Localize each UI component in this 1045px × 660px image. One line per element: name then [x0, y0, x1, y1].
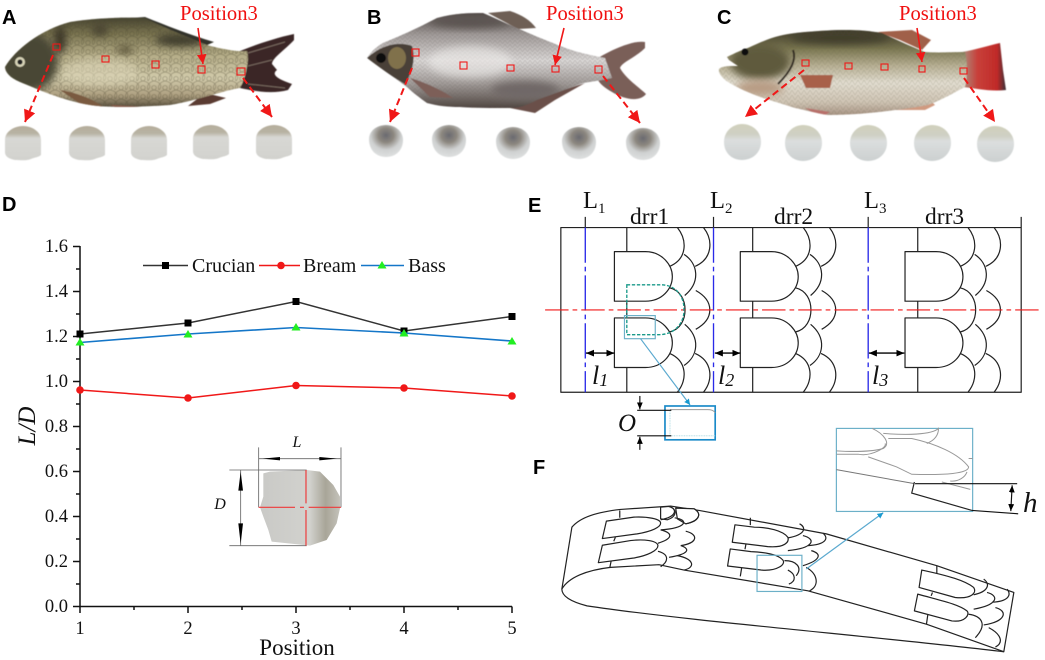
y axis tick labels: 0.4 [45, 507, 68, 527]
small detail box [757, 555, 802, 591]
blue section lines [585, 228, 868, 392]
x axis tick labels [75, 619, 517, 639]
sampling position markers [53, 44, 245, 75]
label L3: L [864, 187, 879, 214]
inset: magnified riblet [836, 428, 973, 511]
arrow: zoom to inset [806, 513, 883, 569]
label drr3: drr3 [925, 204, 964, 230]
label D: D [213, 496, 226, 513]
label L1: 1 [598, 201, 605, 217]
label l2: l [718, 361, 725, 390]
photo: crucian fish [0, 17, 294, 109]
riblet group 2 [740, 228, 836, 392]
legend [143, 255, 446, 277]
inset: scale with L and D dimensions [213, 434, 341, 546]
panel B: bream [367, 3, 660, 160]
photo: bream fish [367, 11, 646, 113]
y axis tick labels: 1.4 [45, 282, 68, 302]
label l1: 1 [599, 370, 608, 390]
panel label B: B [367, 7, 381, 29]
photo: bass fish [719, 30, 1006, 115]
panel label D: D [2, 194, 16, 216]
label L2: 2 [725, 201, 732, 217]
panel label E: E [528, 195, 541, 217]
dimension h [915, 484, 1018, 514]
label drr1: drr1 [630, 204, 669, 230]
label l3: l [872, 361, 879, 390]
y axis tick labels: 1.2 [45, 327, 68, 347]
riblets group 1 [598, 506, 699, 570]
sampling position markers [802, 60, 967, 74]
callout: Position3: Position3 [546, 3, 624, 25]
series: Bass [76, 323, 516, 346]
panel label A: A [2, 7, 16, 29]
y axis tick labels: 0.0 [45, 597, 68, 617]
y axis title: L/D [14, 407, 41, 446]
crucian scale samples [5, 125, 292, 160]
dimension O [637, 396, 671, 450]
label l2: 2 [725, 370, 734, 390]
x axis tick labels: 1 [75, 619, 85, 639]
panel C: bass [717, 3, 1014, 162]
riblet stems [627, 228, 918, 392]
arrow: dashed to first scale [25, 55, 53, 122]
series: Bream [76, 382, 516, 402]
plate outline [561, 217, 1021, 392]
bass scale samples [724, 124, 1014, 162]
label drr2: drr2 [774, 204, 813, 230]
sampling position markers [412, 49, 602, 73]
bream scale samples [369, 125, 660, 160]
y axis tick labels: 0.8 [45, 417, 68, 437]
y axis tick labels: 0.6 [45, 462, 68, 482]
panel A: crucian carp [0, 3, 294, 160]
y axis tick labels: 1.6 [45, 237, 68, 257]
arrow: zoom to detail [641, 339, 690, 405]
label h: h [1023, 487, 1038, 519]
panel E: riblet layout schematic [528, 187, 1041, 450]
legend: Bass [408, 255, 446, 277]
arrow: dashed to last scale [964, 78, 995, 122]
x axis tick labels: 4 [399, 619, 409, 639]
legend: Crucian [192, 255, 255, 277]
arrow: to position 3 [917, 28, 922, 62]
panel label F: F [533, 457, 545, 479]
panel D: L/D line chart [2, 194, 517, 660]
red center line [545, 308, 1041, 312]
arrow: dashed to first scale [745, 70, 804, 117]
x axis tick labels: 3 [291, 619, 301, 639]
y axis tick labels: 0.2 [45, 552, 68, 572]
label O: O [618, 410, 636, 437]
arrow: dashed to last scale [603, 76, 640, 123]
riblet group 1 [614, 228, 710, 392]
spacing arrows [586, 351, 904, 355]
callout: Position3: Position3 [180, 3, 258, 25]
arrow: dashed to first scale [390, 68, 412, 122]
riblets group 2 [728, 518, 826, 591]
axes [73, 246, 512, 613]
label l3: 3 [878, 370, 888, 390]
y axis tick labels: 1.0 [45, 372, 68, 392]
lower edge of top surface [562, 565, 1004, 652]
section ticks [585, 217, 868, 228]
airfoil outline [562, 506, 1014, 652]
blue detail box [624, 316, 655, 339]
callout: Position3: Position3 [899, 3, 977, 25]
label L3: 3 [879, 201, 886, 217]
arrow: dashed to last scale [243, 78, 272, 117]
series: Crucian [76, 298, 516, 338]
detail inset [665, 406, 715, 440]
x axis title: Position [259, 635, 335, 660]
arrow: to position 3 [198, 28, 203, 64]
label L: L [292, 434, 302, 451]
y axis tick labels [45, 237, 68, 617]
arrow: to position 3 [555, 28, 564, 65]
panel F: airfoil with riblets [533, 428, 1038, 652]
teal dashed outline [627, 285, 684, 335]
label L2: L [710, 187, 725, 214]
label l1: l [592, 361, 599, 390]
riblet group 3 [905, 228, 1000, 392]
x axis tick labels: 2 [183, 619, 193, 639]
riblets group 3 [914, 566, 1009, 647]
legend: Bream [303, 255, 357, 277]
panel label C: C [717, 7, 731, 29]
x axis tick labels: 5 [507, 619, 517, 639]
label L1: L [583, 187, 598, 214]
